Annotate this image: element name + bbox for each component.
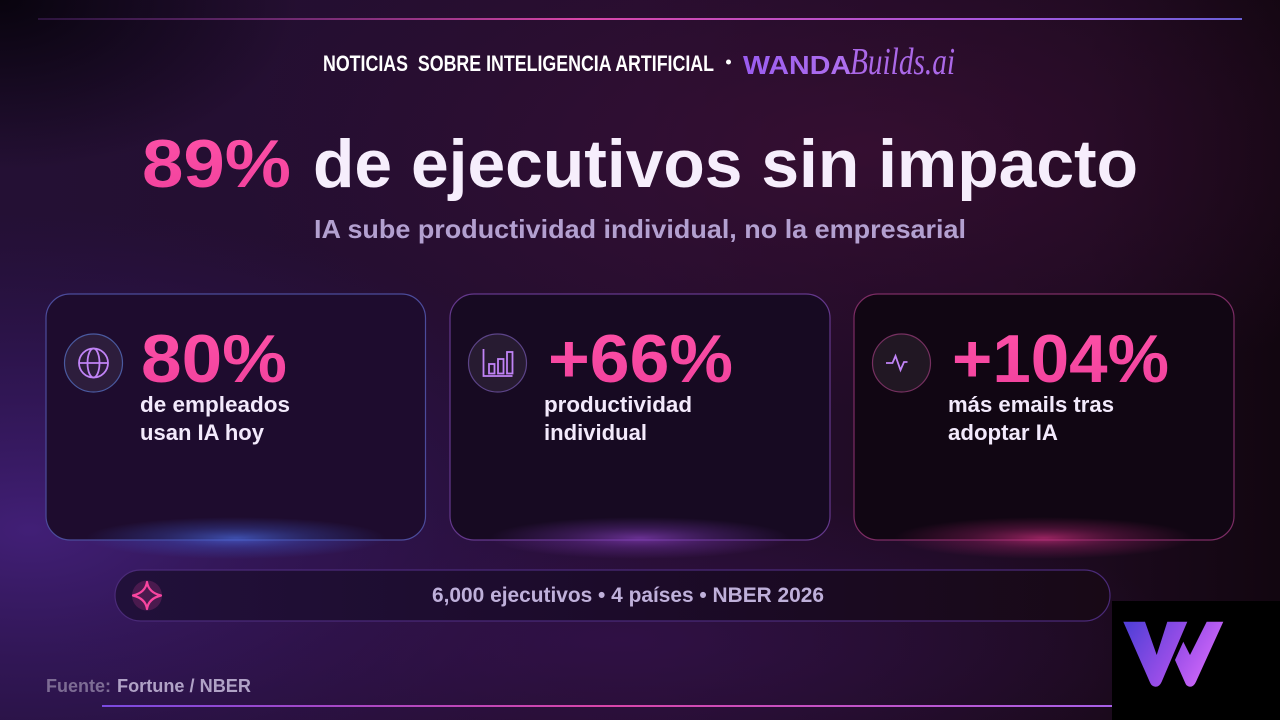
panel: +66% productivity: [450, 294, 830, 559]
source credit: Fortune / NBER: [117, 676, 251, 696]
panel: +104% emails: [854, 294, 1234, 559]
stat value: +66%: [548, 321, 733, 397]
source credit: [46, 676, 251, 696]
stat description: usan IA hoy: [140, 420, 265, 445]
bottom accent line: [102, 705, 1112, 707]
strip body: [115, 570, 1110, 621]
stat description: más emails tras: [948, 392, 1114, 417]
stat value: +104%: [952, 321, 1169, 397]
card glow: [86, 517, 386, 559]
panel: source sample strip: [115, 570, 1110, 621]
subtitle: IA sube productividad individual, no la empresarial: [314, 214, 966, 244]
title: [142, 126, 1138, 202]
stat description: de empleados: [140, 392, 290, 417]
icon: pulse: [872, 334, 930, 392]
brand script: Builds.ai: [850, 41, 955, 83]
card body: [46, 294, 426, 540]
icon: bar chart: [468, 334, 526, 392]
icon: sparkle: [132, 580, 162, 610]
card body: [450, 294, 830, 540]
brand name: WANDA: [743, 50, 851, 80]
header brand bar: [323, 41, 955, 83]
stat description: productividad: [544, 392, 692, 417]
stat description: [948, 392, 1114, 445]
source credit: Fuente:: [46, 676, 111, 696]
title highlight: 89%: [142, 126, 291, 202]
stat description: [140, 392, 290, 445]
top accent line: [38, 18, 1242, 20]
title text: de ejecutivos sin impacto: [313, 126, 1138, 202]
stat description: individual: [544, 420, 647, 445]
panel: 80% employees: [46, 294, 426, 559]
stat description: [544, 392, 692, 445]
card glow: [490, 517, 790, 559]
icon: W logo: [1123, 622, 1223, 687]
logo block: [1112, 601, 1280, 720]
stat value: 80%: [141, 321, 287, 397]
card glow: [894, 517, 1194, 559]
stat description: adoptar IA: [948, 420, 1058, 445]
logo background: [1112, 601, 1280, 720]
card body: [854, 294, 1234, 540]
strip text: 6,000 ejecutivos • 4 países • NBER 2026: [432, 584, 824, 607]
bullet separator: [726, 60, 731, 64]
header label: NOTICIAS SOBRE INTELIGENCIA ARTIFICIAL: [323, 51, 714, 76]
icon: globe: [64, 334, 122, 392]
